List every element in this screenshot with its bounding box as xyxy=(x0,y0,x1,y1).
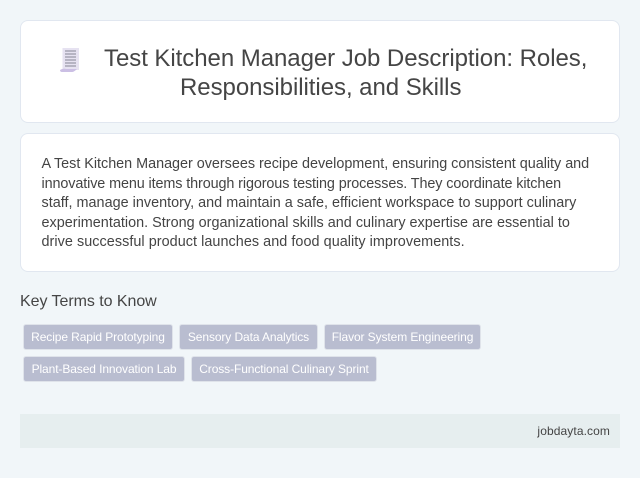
description text: innovative menu items through rigorous testing processes. They coordinate kitchen xyxy=(42,176,561,192)
panel: title card xyxy=(20,20,620,123)
description text: staff, manage inventory, and maintain a safe, efficient workspace to support culinary xyxy=(42,195,576,211)
description text: experimentation. Strong organizational skills and culinary expertise are essential to xyxy=(42,215,570,231)
tag: Plant-Based Innovation Lab xyxy=(32,362,176,376)
tag: Sensory Data Analytics xyxy=(188,330,309,344)
tag xyxy=(23,356,185,382)
icon: document receipt xyxy=(60,48,79,72)
footer bar xyxy=(20,414,620,448)
tag: Cross-Functional Culinary Sprint xyxy=(199,362,369,376)
footer source text: jobdayta.com xyxy=(537,424,610,438)
heading: key terms: Key Terms to Know xyxy=(20,293,157,310)
tag xyxy=(179,324,318,350)
tag xyxy=(191,356,377,382)
description text xyxy=(42,156,589,250)
tag xyxy=(23,324,173,350)
tag: Recipe Rapid Prototyping xyxy=(31,330,165,344)
title line 1: Test Kitchen Manager Job Description: Roles, xyxy=(104,45,587,72)
description text: A Test Kitchen Manager oversees recipe development, ensuring consistent quality and xyxy=(42,156,589,172)
title line 2: Responsibilities, and Skills xyxy=(180,74,461,101)
description text: drive successful product launches and food quality improvements. xyxy=(42,234,465,250)
tag xyxy=(324,324,481,350)
panel: description card xyxy=(20,133,620,272)
tag: Flavor System Engineering xyxy=(332,330,473,344)
